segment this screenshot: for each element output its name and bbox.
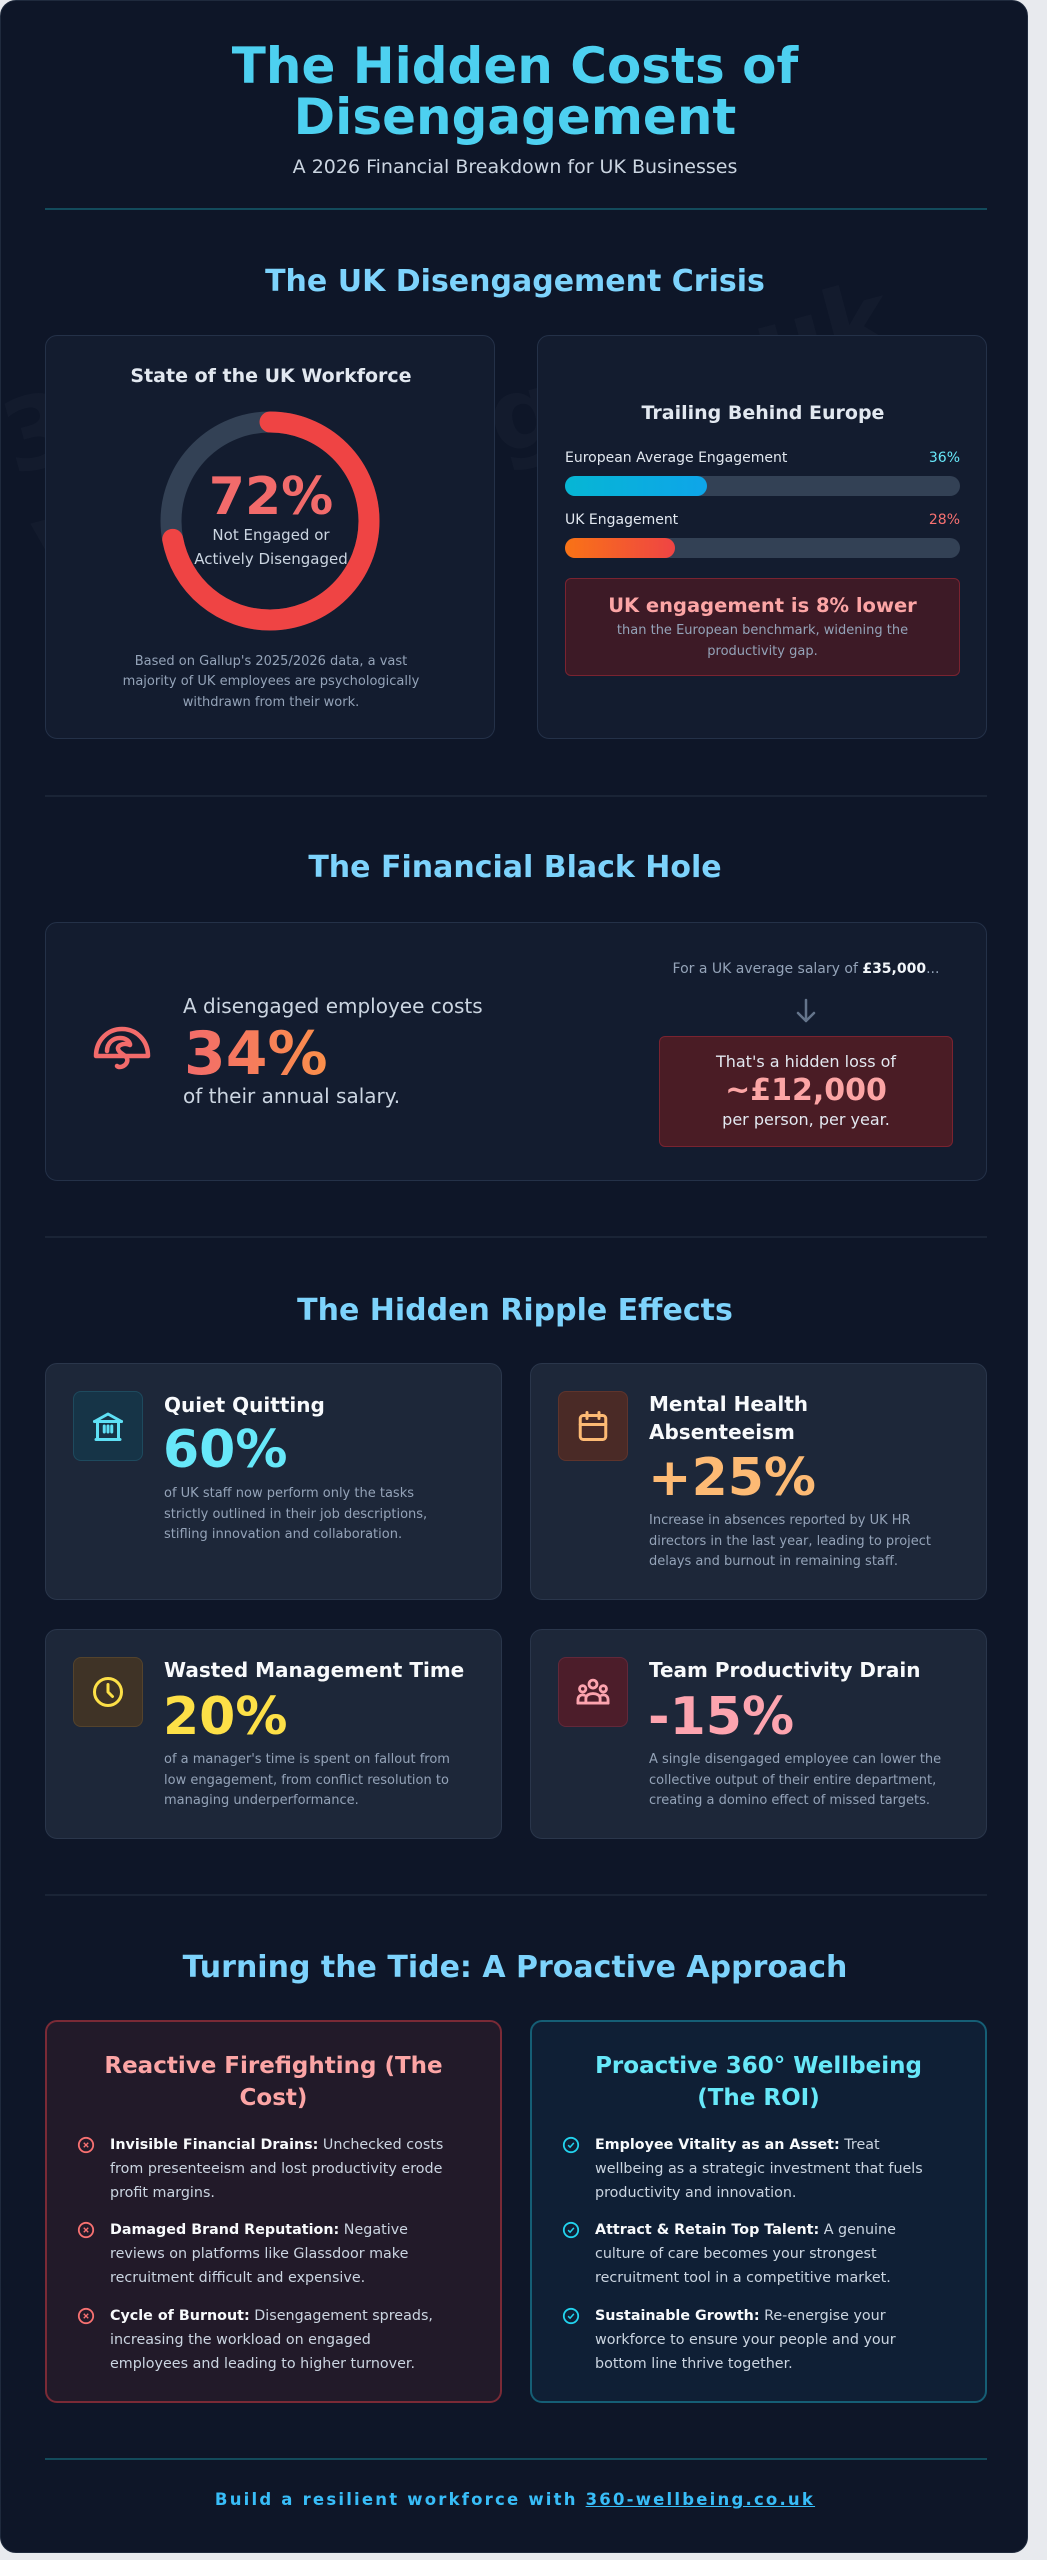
card: team productivity drain (530, 1629, 987, 1839)
bar: uk (565, 512, 960, 558)
panel heading: Trailing Behind Europe (642, 402, 884, 424)
big value: 34% (184, 1019, 328, 1089)
card: quiet quitting: 60% (163, 1420, 287, 1480)
card: wasted management time: managing underperformance. (164, 1793, 359, 1808)
card: wasted management time: 20% (163, 1687, 287, 1747)
callout: UK engagement is 8% lower (608, 594, 917, 617)
caption: withdrawn from their work. (183, 695, 359, 710)
cost text: A disengaged employee costs (183, 994, 483, 1018)
caption (123, 654, 419, 710)
panel heading: Cost) (240, 2085, 307, 2111)
title: The Hidden Costs of (232, 37, 798, 95)
card: wasted management time: Wasted Management Time (164, 1658, 464, 1682)
item 2 (78, 2222, 408, 2286)
panel heading: Proactive 360° Wellbeing (595, 2053, 922, 2079)
item 3: workforce to ensure your people and your (595, 2332, 896, 2348)
bar: europe: European Average Engagement (565, 450, 787, 466)
bar: europe (565, 450, 960, 496)
salary note: For a UK average salary of £35,000... (673, 961, 939, 977)
card: quiet quitting: of UK staff now perform only the tasks (164, 1486, 414, 1501)
card: quiet quitting: stifling innovation and collaboration. (164, 1527, 402, 1542)
subtitle: A 2026 Financial Breakdown for UK Businesses (293, 156, 737, 178)
panel: trailing behind europe (537, 335, 987, 739)
item 1: Employee Vitality as an Asset: Treat (595, 2137, 880, 2153)
card: wasted management time: of a manager's time is spent on fallout from (164, 1752, 450, 1767)
donut label (194, 526, 348, 568)
item 1: profit margins. (110, 2185, 215, 2201)
bar: uk: UK Engagement (565, 512, 678, 528)
item 2: Damaged Brand Reputation: Negative (110, 2222, 408, 2238)
card: mental health (530, 1363, 987, 1600)
card: team productivity drain: creating a domino effect of missed targets. (649, 1793, 930, 1808)
loss box: per person, per year. (722, 1110, 890, 1129)
donut chart (160, 412, 380, 630)
footer: Build a resilient workforce with 360-wellbeing.co.uk (215, 2490, 815, 2509)
icon: users (558, 1657, 628, 1727)
callout: than the European benchmark, widening the (617, 623, 908, 638)
bar: uk: 28% (929, 512, 960, 528)
panel heading: Reactive Firefighting (The (104, 2053, 443, 2079)
icon: calendar (558, 1391, 628, 1461)
panel: reactive firefighting (45, 2020, 502, 2403)
donut label: Not Engaged or (212, 526, 330, 544)
item 1: from presenteeism and lost productivity erode (110, 2161, 442, 2177)
card: mental health: +25% (648, 1448, 816, 1508)
arrow (796, 998, 816, 1022)
card: mental health: directors in the last year, leading to project (649, 1534, 931, 1548)
item 3: increasing the workload on engaged (110, 2332, 371, 2348)
caption: Based on Gallup's 2025/2026 data, a vast (135, 654, 407, 669)
panel: financial: of their annual salary. (183, 1084, 400, 1108)
heading: financial black hole: The Financial Black Hole (308, 850, 722, 885)
donut value: 72% (209, 467, 333, 527)
icon: clock (73, 1657, 143, 1727)
item 1: wellbeing as a strategic investment that fuels (595, 2161, 923, 2177)
item 2: reviews on platforms like Glassdoor make (110, 2246, 408, 2262)
item 2: Attract & Retain Top Talent: A genuine (595, 2222, 896, 2238)
card: quiet quitting: Quiet Quitting (164, 1393, 325, 1417)
caption: majority of UK employees are psychologically (123, 674, 419, 689)
item 3: bottom line thrive together. (595, 2356, 793, 2372)
card: team productivity drain: A single disengaged employee can lower the (649, 1752, 941, 1767)
panel heading (104, 2053, 443, 2111)
item 2: recruitment difficult and expensive. (110, 2270, 365, 2286)
title: Disengagement (294, 88, 736, 146)
panel heading (595, 2053, 922, 2111)
callout (565, 578, 960, 676)
item 3: employees and leading to higher turnover. (110, 2356, 415, 2372)
loss box: ~£12,000 (725, 1073, 887, 1108)
card: quiet quitting: strictly outlined in their job descriptions, (164, 1506, 427, 1522)
item 3 (562, 2308, 896, 2372)
item 1 (562, 2136, 923, 2201)
watermark: wellbeing.co.uk (17, 258, 904, 601)
panel: financial (45, 922, 987, 1181)
card: mental health: Mental Health (649, 1392, 808, 1416)
item 2: culture of care becomes your strongest (595, 2246, 877, 2262)
card: mental health: Increase in absences reported by UK HR (649, 1513, 911, 1528)
card: team productivity drain: collective output of their entire department, (649, 1772, 936, 1788)
panel: state of workforce (45, 335, 495, 739)
item 1 (78, 2136, 443, 2201)
item 3: Cycle of Burnout: Disengagement spreads, (110, 2308, 433, 2324)
panel heading: (The ROI) (697, 2085, 820, 2111)
callout: productivity gap. (707, 644, 818, 659)
card: mental health: delays and burnout in remaining staff. (649, 1554, 898, 1569)
item 3: Sustainable Growth: Re-energise your (595, 2308, 886, 2324)
heading: UK crisis: The UK Disengagement Crisis (265, 264, 765, 299)
card: team productivity drain: Team Productivity Drain (649, 1658, 920, 1682)
item 3 (78, 2308, 433, 2372)
item 2: recruitment tool in a competitive market. (595, 2270, 891, 2286)
icon: cost symbol (94, 1026, 150, 1070)
item 1: productivity and innovation. (595, 2185, 796, 2201)
item 2 (562, 2222, 896, 2286)
card: wasted management time: low engagement, from conflict resolution to (164, 1772, 449, 1788)
bar: europe: 36% (929, 450, 960, 466)
loss box: That's a hidden loss of (716, 1052, 896, 1071)
card: wasted management time (45, 1629, 502, 1839)
icon: landmark (73, 1391, 143, 1461)
heading: turning the tide: Turning the Tide: A Proactive Approach (183, 1950, 847, 1985)
panel heading: State of the UK Workforce (130, 365, 412, 387)
heading: ripple effects: The Hidden Ripple Effects (297, 1293, 733, 1328)
title (232, 37, 799, 146)
card: mental health: Absenteeism (649, 1420, 795, 1444)
donut label: Actively Disengaged (194, 550, 348, 568)
panel: proactive wellbeing (530, 2020, 987, 2403)
item 1: Invisible Financial Drains: Unchecked costs (110, 2137, 443, 2153)
card: team productivity drain: -15% (648, 1687, 794, 1747)
card: quiet quitting (45, 1363, 502, 1600)
loss box (659, 1036, 953, 1147)
